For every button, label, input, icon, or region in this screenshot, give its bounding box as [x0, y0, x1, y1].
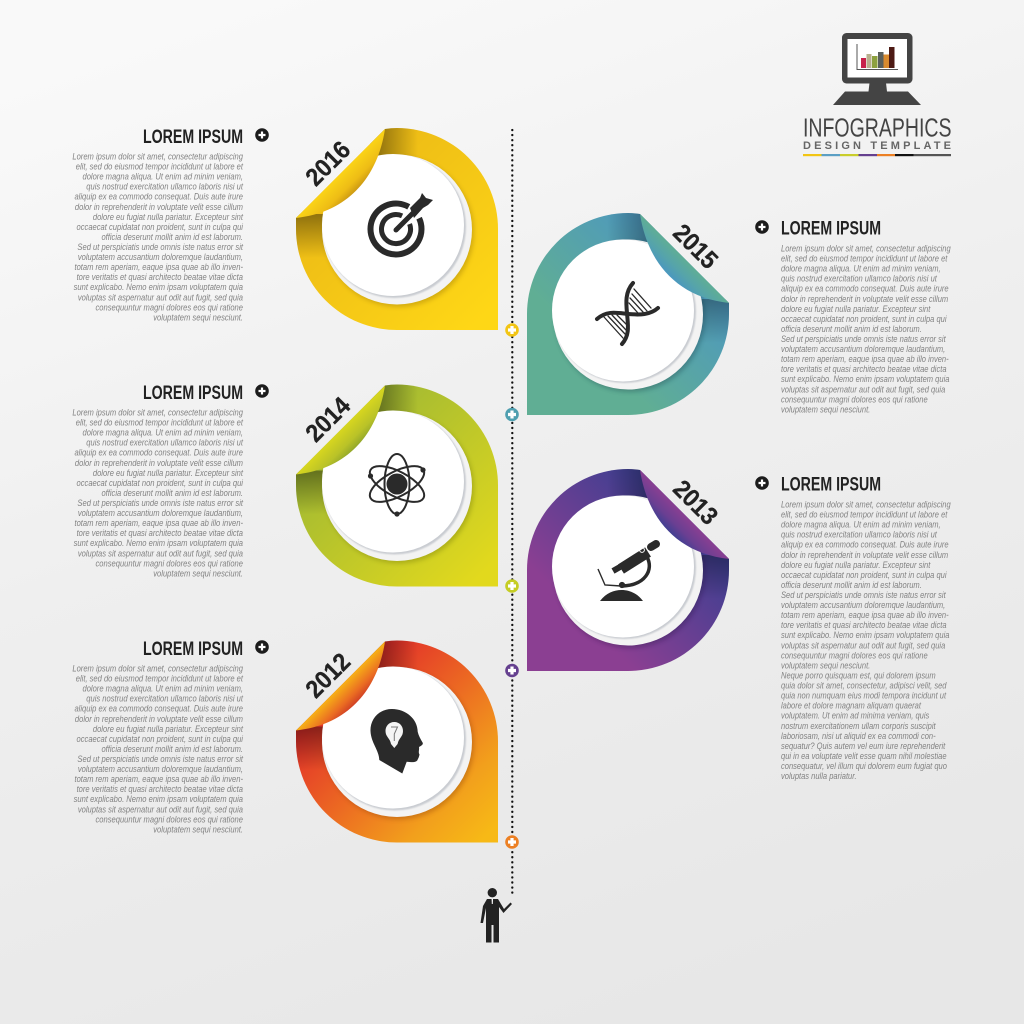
text block: left 1: aliquip ex ea commodo consequat. Duis aute irure [74, 191, 243, 202]
text block: left 2: aliquip ex ea commodo consequat. Duis aute irure [74, 447, 243, 458]
text block: right 2: labore et dolore magnam aliquam quaerat [781, 700, 922, 711]
text block: left 2: tore veritatis et quasi architecto beatae vitae dicta [77, 527, 243, 538]
year 2013: 2013 [667, 475, 723, 531]
icon: target with arrow [370, 193, 433, 254]
text block: left 3: Sed ut perspiciatis unde omnis iste natus error sit [77, 753, 244, 764]
peeled flap 2014 [296, 386, 385, 474]
icon: head with light bulb [370, 709, 423, 774]
plus icon: right 2 [755, 476, 769, 490]
disc shadow 2012 [324, 670, 474, 820]
text block: left 2: officia deserunt mollit anim id est laborum. [101, 487, 243, 498]
timeline node: lime [505, 579, 519, 593]
pin 2016 [294, 125, 498, 330]
peeled flap 2016 [296, 129, 385, 218]
text block: right 2: voluptatem sequi nesciunt. [781, 660, 870, 671]
disc rim 2016 [322, 154, 472, 304]
text block: right 2: Neque porro quisquam est, qui dolorem ipsum [781, 670, 936, 681]
fold shading 2016 [296, 128, 414, 254]
heading: left 3: LOREM IPSUM [143, 638, 243, 660]
pin 2013 [527, 466, 731, 671]
year 2014: 2014 [300, 392, 356, 448]
disc rim 2012 [322, 667, 472, 817]
text block: right 2: quis nostrud exercitation ullamco laboris nisi ut [781, 529, 937, 540]
text block: right 2: laboriosam, nisi ut aliquid ex ea commodi con- [781, 730, 936, 741]
logo colour bar [803, 154, 951, 156]
text block: right 1: elit, sed do eiusmod tempor incididunt ut labore et [781, 253, 948, 264]
text block: right 1: voluptatem accusantium doloremque laudantium, [781, 343, 945, 354]
timeline dotted line [511, 130, 513, 893]
peeled flap 2015 [640, 214, 729, 303]
text block: right 1: sunt explicabo. Nemo enim ipsam voluptatem quia [781, 373, 950, 384]
text block: left 2: totam rem aperiam, eaque ipsa quae ab illo inven- [74, 517, 243, 528]
timeline node: yellow [505, 323, 519, 337]
text block: right 1: officia deserunt mollit anim id est laborum. [781, 323, 922, 334]
text block: left 2: voluptas sit aspernatur aut odit aut fugit, sed quia [78, 548, 243, 558]
text block: left 2: voluptatem sequi nesciunt. [153, 568, 243, 579]
text block: left 1: Lorem ipsum dolor sit amet, consectetur adipiscing [72, 151, 243, 162]
text block: left 1: sunt explicabo. Nemo enim ipsam voluptatem quia [74, 282, 243, 292]
text block: left 3: dolore magna aliqua. Ut enim ad minim veniam, [82, 683, 243, 694]
text block: left 1: tore veritatis et quasi architecto beatae vitae dicta [77, 271, 243, 282]
white disc 2013 [552, 496, 694, 638]
year 2012: 2012 [300, 648, 356, 704]
icon: DNA helix [597, 283, 658, 344]
year 2016: 2016 [300, 136, 356, 192]
text block: left 2: Sed ut perspiciatis unde omnis iste natus error sit [77, 497, 244, 508]
text block: right 2: sunt explicabo. Nemo enim ipsam voluptatem quia [781, 629, 950, 640]
plus icon: left 3 [255, 640, 269, 654]
text block: left 3: sunt explicabo. Nemo enim ipsam voluptatem quia [74, 794, 243, 804]
text block: left 2: sunt explicabo. Nemo enim ipsam voluptatem quia [74, 538, 243, 548]
logo title: INFOGRAPHICS [803, 114, 952, 142]
disc crescent 2014 [323, 412, 466, 554]
pin body 2016 [296, 128, 498, 330]
disc crescent 2016 [323, 155, 466, 298]
timeline node: teal [505, 408, 519, 421]
text block: right 1: dolor in reprehenderit in voluptate velit esse cillum [781, 293, 948, 304]
text block: right 2: voluptas sit aspernatur aut odit aut fugit, sed quia [781, 640, 946, 650]
year 2015: 2015 [667, 219, 723, 275]
text block: right 2: tore veritatis et quasi architecto beatae vitae dicta [781, 619, 947, 630]
text block: left 2: voluptatem accusantium doloremque laudantium, [78, 507, 243, 518]
text block: right 2: dolore eu fugiat nulla pariatur. Excepteur sint [781, 559, 931, 570]
disc crescent 2015 [553, 240, 696, 383]
disc shadow 2014 [324, 414, 474, 564]
text block: right 1: voluptatem sequi nesciunt. [781, 404, 870, 415]
fold shading 2012 [296, 640, 414, 766]
text block: left 1: voluptatem sequi nesciunt. [153, 312, 243, 323]
plus icon: left 1 [255, 128, 269, 142]
text block: left 1: voluptatem accusantium doloremque laudantium, [78, 251, 243, 262]
pin body 2013 [527, 466, 731, 671]
icon: atom [365, 454, 429, 517]
logo: monitor icon [833, 33, 921, 105]
text block: right 1: Sed ut perspiciatis unde omnis iste natus error sit [781, 333, 946, 344]
text block: right 1: occaecat cupidatat non proident, sunt in culpa qui [781, 313, 948, 324]
text block: left 1: consequuntur magni dolores eos qui ratione [96, 302, 243, 313]
text block: right 2: officia deserunt mollit anim id est laborum. [781, 579, 922, 590]
text block: right 1: dolore magna aliqua. Ut enim ad minim veniam, [781, 263, 941, 274]
logo subtitle: DESIGN TEMPLATE [803, 140, 951, 152]
text block: left 3: aliquip ex ea commodo consequat. Duis aute irure [74, 703, 243, 714]
text block: left 2: consequuntur magni dolores eos qui ratione [96, 558, 243, 569]
text block: left 3: Lorem ipsum dolor sit amet, consectetur adipiscing [72, 663, 243, 674]
heading: right 1: LOREM IPSUM [781, 218, 881, 240]
text block: right 1: consequuntur magni dolores eos qui ratione [781, 394, 928, 405]
text block: left 3: dolore eu fugiat nulla pariatur. Excepteur sint [93, 723, 244, 734]
text block: left 3: officia deserunt mollit anim id est laborum. [101, 743, 243, 754]
disc shadow 2016 [324, 157, 474, 307]
text block: left 1: quis nostrud exercitation ullamco laboris nisi ut [86, 181, 244, 192]
text block: right 2: sequatur? Quis autem vel eum iure reprehenderit [781, 740, 946, 751]
text block: right 2 [781, 499, 951, 781]
plus icon: right 1 [755, 220, 769, 234]
text block: left 1: occaecat cupidatat non proident, sunt in culpa qui [77, 221, 244, 232]
text block: left 1 [72, 151, 244, 323]
text block: right 2: quia non numquam eius modi tempora incidunt ut [781, 690, 947, 701]
text block: right 2: consequuntur magni dolores eos qui ratione [781, 650, 928, 661]
text block: right 2: qui in ea voluptate velit esse quam nihil molestiae [781, 750, 947, 761]
disc shadow 2015 [555, 242, 705, 392]
pin body 2014 [296, 384, 498, 586]
timeline node: purple [505, 664, 519, 677]
text block: left 3: voluptas sit aspernatur aut odit aut fugit, sed quia [78, 804, 243, 814]
text block: left 3: quis nostrud exercitation ullamco laboris nisi ut [86, 693, 244, 704]
text block: right 2: aliquip ex ea commodo consequat. Duis aute irure [781, 539, 949, 550]
text block: left 2: quis nostrud exercitation ullamco laboris nisi ut [86, 437, 244, 448]
text block: left 1: Sed ut perspiciatis unde omnis iste natus error sit [77, 241, 244, 252]
text block: right 1: tore veritatis et quasi architecto beatae vitae dicta [781, 363, 947, 374]
disc rim 2014 [322, 411, 472, 561]
text block: right 2: dolor in reprehenderit in voluptate velit esse cillum [781, 549, 948, 560]
text block: left 1: dolore eu fugiat nulla pariatur. Excepteur sint [93, 211, 244, 222]
pin 2012 [294, 638, 498, 842]
fold shading 2014 [296, 384, 414, 510]
disc shadow 2013 [555, 498, 705, 648]
heading: left 2: LOREM IPSUM [143, 382, 243, 404]
text block: right 1: quis nostrud exercitation ullamco laboris nisi ut [781, 273, 937, 284]
text block: left 1: officia deserunt mollit anim id est laborum. [101, 231, 243, 242]
text block: left 1: voluptas sit aspernatur aut odit aut fugit, sed quia [78, 292, 243, 302]
peeled flap 2012 [296, 642, 385, 730]
text block: left 3: voluptatem accusantium doloremque laudantium, [78, 763, 243, 774]
text block: left 2: Lorem ipsum dolor sit amet, consectetur adipiscing [72, 407, 243, 418]
disc rim 2015 [553, 240, 703, 390]
disc rim 2013 [553, 496, 703, 646]
disc crescent 2013 [553, 496, 696, 639]
text block: left 3: occaecat cupidatat non proident, sunt in culpa qui [77, 733, 244, 744]
pin 2015 [527, 210, 731, 415]
text block: right 1 [781, 243, 951, 415]
text block: right 2: occaecat cupidatat non proident, sunt in culpa qui [781, 569, 948, 580]
text block: right 2: voluptatem. Ut enim ad minima veniam, quis [781, 710, 930, 721]
text block: left 2: dolore eu fugiat nulla pariatur. Excepteur sint [93, 467, 244, 478]
white disc 2016 [322, 154, 464, 296]
text block: left 1: totam rem aperiam, eaque ipsa quae ab illo inven- [74, 261, 243, 272]
disc crescent 2012 [323, 668, 466, 810]
text block: left 2: occaecat cupidatat non proident, sunt in culpa qui [77, 477, 244, 488]
icon: microscope [598, 544, 656, 601]
text block: left 3: voluptatem sequi nesciunt. [153, 824, 243, 835]
plus icon: left 2 [255, 384, 269, 398]
text block: left 3: totam rem aperiam, eaque ipsa quae ab illo inven- [74, 773, 243, 784]
text block: left 3: consequuntur magni dolores eos qui ratione [96, 814, 243, 825]
text block: left 1: dolor in reprehenderit in voluptate velit esse cillum [75, 201, 243, 212]
text block: left 3: elit, sed do eiusmod tempor incididunt ut labore et [76, 673, 244, 684]
text block: right 1: aliquip ex ea commodo consequat. Duis aute irure [781, 283, 949, 294]
text block: right 1: voluptas sit aspernatur aut odit aut fugit, sed quia [781, 384, 946, 394]
heading: left 1: LOREM IPSUM [143, 126, 243, 148]
white disc 2014 [322, 410, 464, 552]
pin body 2012 [296, 640, 498, 842]
text block: left 1: elit, sed do eiusmod tempor incididunt ut labore et [76, 161, 244, 172]
text block: left 3: dolor in reprehenderit in voluptate velit esse cillum [75, 713, 243, 724]
text block: left 3 [72, 663, 244, 835]
text block: right 2: elit, sed do eiusmod tempor incididunt ut labore et [781, 509, 948, 520]
text block: right 2: totam rem aperiam, eaque ipsa quae ab illo inven- [781, 609, 949, 620]
text block: left 2 [72, 407, 244, 579]
peeled flap 2013 [640, 470, 729, 559]
text block: right 1: dolore eu fugiat nulla pariatur. Excepteur sint [781, 303, 931, 314]
text block: left 2: dolor in reprehenderit in voluptate velit esse cillum [75, 457, 243, 468]
text block: right 1: Lorem ipsum dolor sit amet, consectetur adipiscing [781, 243, 951, 254]
text block: left 1: dolore magna aliqua. Ut enim ad minim veniam, [82, 171, 243, 182]
timeline node: orange [505, 835, 519, 849]
heading: right 2: LOREM IPSUM [781, 474, 881, 496]
text block: right 1: totam rem aperiam, eaque ipsa quae ab illo inven- [781, 353, 949, 364]
text block: right 2: consequatur, vel illum qui dolorem eum fugiat quo [781, 760, 947, 771]
text block: right 2: quia dolor sit amet, consectetur, adipisci velit, sed [781, 680, 947, 691]
text block: right 2: nostrum exercitationem ullam corporis suscipit [781, 720, 936, 731]
text block: right 2: Sed ut perspiciatis unde omnis iste natus error sit [781, 589, 946, 600]
text block: left 3: tore veritatis et quasi architecto beatae vitae dicta [77, 783, 243, 794]
text block: right 2: voluptas nulla pariatur. [781, 770, 857, 781]
text block: left 2: dolore magna aliqua. Ut enim ad minim veniam, [82, 427, 243, 438]
white disc 2012 [322, 666, 464, 808]
text block: right 2: dolore magna aliqua. Ut enim ad minim veniam, [781, 519, 941, 530]
text block: left 2: elit, sed do eiusmod tempor incididunt ut labore et [76, 417, 244, 428]
text block: right 2: voluptatem accusantium doloremque laudantium, [781, 599, 945, 610]
icon: presenter figure [480, 888, 512, 942]
pin body 2015 [527, 210, 731, 415]
text block: right 2: Lorem ipsum dolor sit amet, consectetur adipiscing [781, 499, 951, 510]
white disc 2015 [552, 240, 694, 382]
pin 2014 [294, 382, 498, 586]
